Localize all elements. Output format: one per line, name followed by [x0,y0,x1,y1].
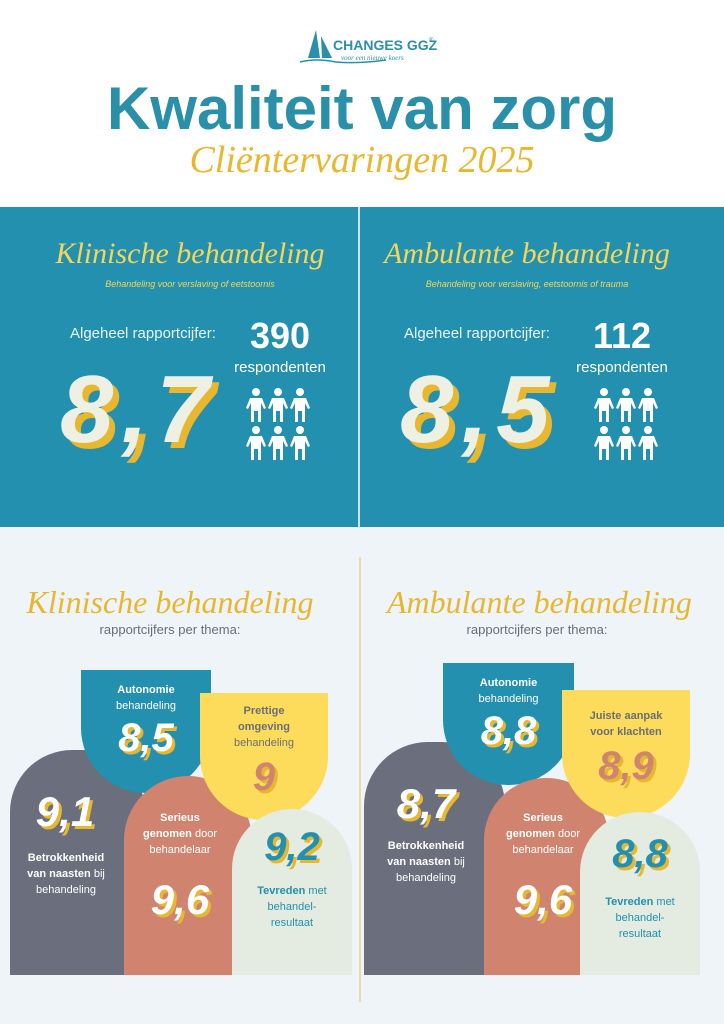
yellow shape: prettige omgeving: omgeving [238,721,290,733]
yellow shape: juiste aanpak: Juiste aanpak [590,710,662,722]
heading: Klinische behandeling [26,584,314,620]
gray shape: betrokkenheid ambulant: behandeling [396,872,456,884]
respondent count: 390 [250,315,310,356]
teal shape: autonomie [81,670,211,793]
salmon shape: serieus ambulant: Serieus [523,812,563,824]
panel: ambulant themes [385,584,692,637]
panel: ambulant themes: Ambulante behandeling [387,584,692,620]
green shape: tevreden ambulant: resultaat [619,928,661,940]
yellow shape: juiste aanpak [562,690,690,818]
logo: CHANGES GGZ [333,37,438,53]
yellow shape: juiste aanpak: 8,9 [598,744,654,788]
gray shape: betrokkenheid: Betrokkenheid [28,852,104,864]
subtitle: Cliëntervaringen 2025 [189,139,535,181]
green shape: tevreden ambulant: Tevreden met [605,896,675,908]
panel: ambulant overall: 8,5 [400,356,557,463]
panel: ambulant overall: respondenten [576,359,668,376]
green shape: tevreden ambulant [580,812,700,975]
gray shape: betrokkenheid: van naasten bij [27,868,105,880]
logo: ® [429,37,434,44]
yellow shape: prettige omgeving [200,693,328,820]
salmon shape: serieus: 9,6 [151,876,209,923]
gray shape: betrokkenheid: 9,1 [36,788,94,835]
teal shape: autonomie ambulant [443,663,574,785]
yellow shape: juiste aanpak: voor klachten [590,726,662,738]
gray shape: betrokkenheid: behandeling [36,884,96,896]
green shape: tevreden: resultaat [271,917,313,929]
title: Kwaliteit van zorg [107,75,617,142]
salmon shape: serieus: Serieus [160,812,200,824]
subheading: Behandeling voor verslaving of eetstoornis [105,279,275,289]
green shape: tevreden: behandel- [268,901,316,913]
panel: top blue [0,207,724,527]
logo: voor een nieuwe koers [341,54,404,62]
panel: bottom [0,527,724,1024]
green shape: tevreden: 9,2 [264,825,320,869]
panel: klinisch themes: rapportcijfers per thema: [100,622,240,637]
yellow shape: prettige omgeving: Prettige [244,705,284,717]
panel: ambulant overall: Algeheel rapportcijfer: [404,325,550,342]
teal shape: autonomie ambulant: 8,8 [481,709,536,753]
salmon shape: serieus ambulant: 9,6 [514,876,572,923]
panel: klinisch themes [26,584,314,637]
green shape: tevreden [232,809,352,975]
green shape: tevreden ambulant: behandel- [616,912,664,924]
salmon shape: serieus [124,776,252,975]
yellow shape: prettige omgeving: behandeling [234,737,294,749]
panel: klinisch overall: respondenten [234,359,326,376]
panel: ambulant overall: Ambulante behandeling [384,237,670,270]
panel: ambulant overall [382,237,670,463]
logo [300,30,438,64]
gray shape: betrokkenheid ambulant: 8,7 [397,780,455,827]
heading: Klinische behandeling [55,237,325,270]
teal shape: autonomie ambulant: behandeling [479,693,538,705]
salmon shape: serieus: behandelaar [149,844,211,856]
teal shape: autonomie ambulant: Autonomie [480,677,537,689]
teal shape: autonomie: behandeling [116,700,176,712]
salmon shape: serieus ambulant: behandelaar [512,844,574,856]
salmon shape: serieus: genomen door [143,828,217,840]
big score: 8,7 [60,356,217,463]
yellow shape: prettige omgeving: 9 [253,755,275,799]
gray shape: betrokkenheid ambulant: Betrokkenheid [388,840,464,852]
salmon shape: serieus ambulant [484,778,609,975]
panel: ambulant overall: 112 [593,315,651,356]
panel: ambulant themes: rapportcijfers per thema: [467,622,607,637]
label: Algeheel rapportcijfer: [70,325,216,342]
gray shape: betrokkenheid [10,750,145,975]
salmon shape: serieus ambulant: genomen door [506,828,580,840]
green shape: tevreden: Tevreden met [257,885,327,897]
gray shape: betrokkenheid ambulant [364,742,505,975]
teal shape: autonomie: 8,5 [118,716,174,760]
icon: people [246,388,310,460]
panel: ambulant overall: Behandeling voor verslaving, eetstoornis of trauma [426,279,628,289]
green shape: tevreden ambulant: 8,8 [612,832,668,876]
panel: klinisch overall [55,237,326,463]
teal shape: autonomie: Autonomie [117,684,175,696]
gray shape: betrokkenheid ambulant: van naasten bij [387,856,465,868]
